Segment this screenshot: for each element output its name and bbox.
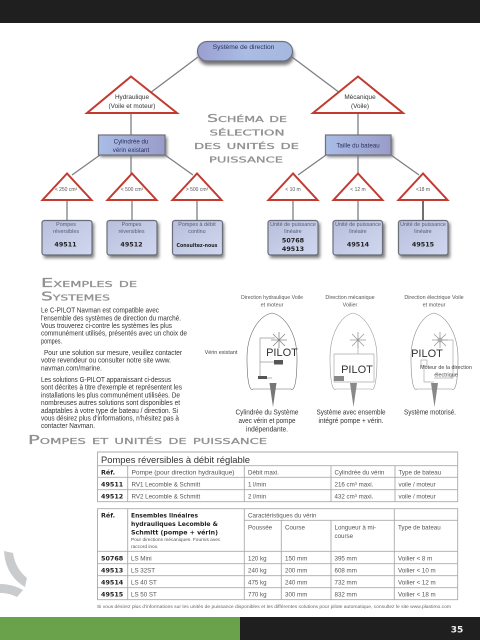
diagram: direction hydraulique: PILOT (266, 347, 298, 359)
diagram: direction mécanique: intégré pompe + vérin. (318, 418, 384, 425)
box: 49512 (107, 220, 157, 255)
criteria triangles: < 250 cm³ (55, 187, 78, 193)
table: ensembles linéaires: 770 kg (248, 592, 267, 598)
table: ensembles linéaires: 732 mm (334, 580, 357, 586)
table: ensembles linéaires: hydrauliques Lecomble & (131, 520, 218, 528)
table: pompes réversibles: 216 cm³ maxi. (334, 482, 374, 488)
table: pompes réversibles: 49511 (101, 480, 123, 488)
diagram: direction hydraulique: indépendante. (246, 426, 288, 434)
diagram: direction mécanique: Direction mécanique (325, 295, 375, 301)
title: schéma de sélection: des unités de (194, 139, 299, 152)
table: ensembles linéaires: 395 mm (334, 556, 357, 562)
box: 49514 (333, 220, 382, 255)
diagram: direction hydraulique: Vérin existant (205, 350, 238, 356)
text block: introduction: navman.com/marine. (41, 366, 102, 372)
table: ensembles linéaires: Réf. (101, 512, 115, 520)
diagram: direction électrique: et moteur (423, 302, 446, 308)
table: pompes réversibles: Débit maxi. (248, 470, 279, 476)
node: hydraulique: Hydraulique (115, 94, 149, 101)
diagram: direction mécanique: Voilier (343, 302, 358, 308)
table: ensembles linéaires: Voilier < 10 m (398, 568, 436, 574)
table: pompes réversibles: 432 cm³ maxi. (334, 494, 374, 500)
diagram: direction mécanique: Système avec ensemble (316, 410, 386, 416)
table: ensembles linéaires: Pour directions mécaniques. Fournis avec (131, 537, 221, 543)
text block: introduction: sont décrites à titre d'exemple et représentent les (41, 385, 182, 392)
box: 49515: 49515 (412, 240, 434, 248)
text block: introduction: adaptables à votre type de bateau / direction. Si (41, 408, 178, 415)
text block: introduction: vous désirez plus d'informations, n'hésitez pas à (41, 416, 179, 422)
bottom green band (0, 617, 240, 640)
node: cylindrée du vérin: vérin existant (113, 147, 150, 154)
diagram: direction électrique: PILOT (411, 348, 443, 360)
table: ensembles linéaires: 200 mm (285, 568, 307, 574)
criteria triangles: < 10 m (285, 187, 301, 193)
table: ensembles linéaires: Course (285, 524, 306, 532)
text block: introduction: Pour une solution sur mesure, veuillez contacter (44, 350, 183, 357)
title: schéma de sélection: puissance (209, 152, 283, 166)
text block: introduction: installations les plus communément utilisées. De (41, 392, 180, 399)
title: schéma de sélection: Schéma de (207, 112, 287, 125)
box: 50768 49513: 50768 (282, 236, 305, 244)
node: système de direction: Système de direction (213, 44, 275, 51)
box: 49511: réversibles (53, 229, 79, 235)
table: pompes réversibles: Pompes réversibles à débit réglable (101, 455, 250, 465)
node: hydraulique (87, 76, 179, 116)
node: hydraulique: (Voile et moteur) (109, 103, 155, 110)
table: ensembles linéaires: 240 mm (285, 580, 307, 586)
node: cylindrée du vérin: Cylindrée du (114, 138, 149, 146)
box: 49514: linéaire (349, 229, 367, 235)
table: ensembles linéaires: Voilier < 12 m (398, 580, 436, 586)
text block: introduction: nombreuses autres solutions sont disponibles et (41, 400, 180, 407)
diagram: direction hydraulique: Direction hydraulique Voile (241, 295, 303, 301)
node: taille du bateau: Taille du bateau (336, 142, 380, 150)
diagram: direction mécanique: PILOT (341, 364, 373, 376)
table: ensembles linéaires: LS Mini (131, 556, 152, 562)
criteria triangles: > 500 cm³ (186, 187, 209, 193)
box: 49511: 49511 (54, 240, 77, 248)
table: pompes réversibles: RV2 Lecomble & Schmitt (132, 494, 200, 500)
box: 49512: réversibles (118, 229, 145, 235)
box: 49512: Pompes (122, 222, 142, 228)
connector lines (67, 57, 423, 220)
table: ensembles linéaires: 49514 (101, 578, 124, 586)
table: pompes réversibles: 2 l/min (248, 494, 267, 500)
box: 50768 49513: 49513 (282, 245, 304, 253)
table: ensembles linéaires: Voilier < 18 m (398, 592, 436, 598)
table: ensembles linéaires: 120 kg (248, 556, 267, 562)
selection flowchart (42, 42, 450, 258)
table: ensembles linéaires: 300 mm (285, 592, 307, 598)
table: ensembles linéaires: 832 mm (334, 592, 357, 598)
box: 49511: Pompes (56, 222, 76, 228)
text block: introduction: votre revendeur ou consulter notre site www. (41, 358, 171, 365)
table: ensembles linéaires: Voilier < 8 m (398, 556, 432, 562)
heading: exemples de systèmes: Systemes (41, 290, 110, 304)
criteria triangles: <18 m (416, 187, 430, 193)
table: ensembles linéaires: 49513 (101, 566, 123, 574)
criteria triangles (42, 174, 449, 203)
text block: introduction: communément utilisés, présentés avec un choix de (41, 331, 187, 338)
table: ensembles linéaires: 475 kg (248, 580, 267, 586)
heading: exemples de systèmes (41, 276, 137, 304)
box: 50768 49513: linéaire (284, 229, 302, 235)
table: pompes réversibles: 49512 (101, 492, 123, 500)
criteria triangles: < 500 cm³ (121, 187, 144, 193)
box: 49514: Unité de puissance (335, 222, 381, 228)
table: ensembles linéaires: LS 32ST (131, 568, 155, 574)
table: ensembles linéaires (98, 509, 458, 600)
page number: 35 (451, 626, 463, 636)
table: ensembles linéaires: course (334, 533, 354, 540)
box: 49514: 49514 (347, 240, 370, 248)
node: mécanique (313, 76, 406, 116)
box: 50768 49513 (268, 220, 318, 255)
result boxes (42, 220, 450, 258)
diagram: direction hydraulique: avec vérin et pompe (238, 418, 296, 425)
title: schéma de sélection (194, 112, 299, 166)
table: ensembles linéaires: LS 40 ST (131, 580, 157, 586)
bottom black band (240, 617, 480, 640)
diagram: direction électrique: Moteur de la direction (420, 365, 472, 371)
heading: exemples de systèmes: Exemples de (41, 276, 137, 290)
text block: introduction: l'ensemble des systèmes de direction du marché. (41, 315, 181, 322)
box: 49512: 49512 (120, 240, 143, 248)
table: pompes réversibles: voile / moteur (398, 482, 436, 488)
diagram: direction électrique: Système motorisé. (404, 410, 456, 416)
text block: introduction: Les solutions G-PILOT apparaissant ci-dessus (41, 377, 171, 384)
diagram: direction hydraulique (205, 295, 303, 434)
watermark logo (0, 551, 27, 597)
table: pompes réversibles: voile / moteur (398, 494, 436, 500)
box: 49515 (398, 220, 448, 255)
diagram: direction électrique (404, 295, 472, 416)
diagram: direction électrique: Direction électrique Voile (404, 295, 464, 301)
node: taille du bateau (326, 135, 393, 157)
text block: introduction: Le C-PILOT Navman est compatible avec (41, 308, 159, 314)
table: pompes réversibles: RV1 Lecomble & Schmitt (132, 482, 200, 488)
title: schéma de sélection: sélection (210, 126, 285, 138)
diagram: direction mécanique (316, 295, 386, 425)
table: ensembles linéaires: 240 kg (248, 568, 267, 574)
box: consultez-nous (172, 220, 222, 255)
table: ensembles linéaires: Poussée (248, 524, 273, 532)
table: ensembles linéaires: 49515 (101, 590, 123, 598)
node: mécanique: Mécanique (344, 94, 376, 101)
table: pompes réversibles: Type de bateau (398, 470, 442, 476)
table: ensembles linéaires: Longueur à mi- (334, 524, 376, 532)
text block: introduction: contacter Navman. (41, 423, 95, 430)
text block: introduction: Vous trouverez ci-contre les systèmes les plus (41, 323, 172, 330)
table: ensembles linéaires: 50768 (101, 554, 124, 562)
table: pompes réversibles: Réf. (101, 468, 115, 476)
table: ensembles linéaires: 150 mm (285, 556, 307, 562)
diagram: direction hydraulique: et moteur (261, 302, 284, 308)
table: ensembles linéaires: Caractéristiques du vérin (248, 512, 317, 520)
node: cylindrée du vérin (98, 135, 167, 157)
diagram: direction hydraulique: Cylindrée du Système (236, 410, 299, 416)
node: système de direction (198, 42, 294, 65)
table: pompes réversibles: 1 l/min (248, 482, 267, 488)
footnote: Si vous désirez plus d'informations sur les unités de puissance disponibles et les différentes solutions pour pilote automatique, consultez le site www.plastimo.com (97, 604, 451, 610)
box: 50768 49513: Unité de puissance (270, 222, 316, 228)
table: ensembles linéaires: Ensembles linéaires (131, 512, 198, 520)
text block: introduction (41, 308, 187, 430)
box: 49511 (42, 220, 92, 255)
heading: pompes et unités de puissance: Pompes et unités de puissance (28, 433, 267, 447)
top black band (0, 0, 480, 23)
box: consultez-nous: Pompes à débit (178, 222, 216, 228)
box: 49515: Unité de puissance (400, 222, 446, 228)
box: consultez-nous: Consultez-nous (176, 243, 218, 249)
box: consultez-nous: continu (188, 229, 206, 235)
box: 49515: linéaire (414, 229, 432, 235)
criteria triangles: < 12 m (350, 187, 366, 193)
table: ensembles linéaires: raccord inox. (131, 544, 158, 550)
diagram: direction électrique: électrique (434, 372, 458, 378)
table: ensembles linéaires: Schmitt (pompe + vérin) (131, 528, 218, 536)
table: pompes réversibles: Cylindrée du vérin (334, 470, 385, 476)
table: pompes réversibles (98, 452, 458, 502)
table: pompes réversibles: Pompe (pour direction hydraulique) (132, 470, 234, 476)
text block: introduction: pompes. (41, 338, 62, 346)
node: mécanique: (Voile) (351, 103, 369, 110)
table: ensembles linéaires: 608 mm (334, 568, 357, 574)
table: ensembles linéaires: Type de bateau (398, 524, 441, 532)
table: ensembles linéaires: LS 50 ST (131, 592, 157, 598)
